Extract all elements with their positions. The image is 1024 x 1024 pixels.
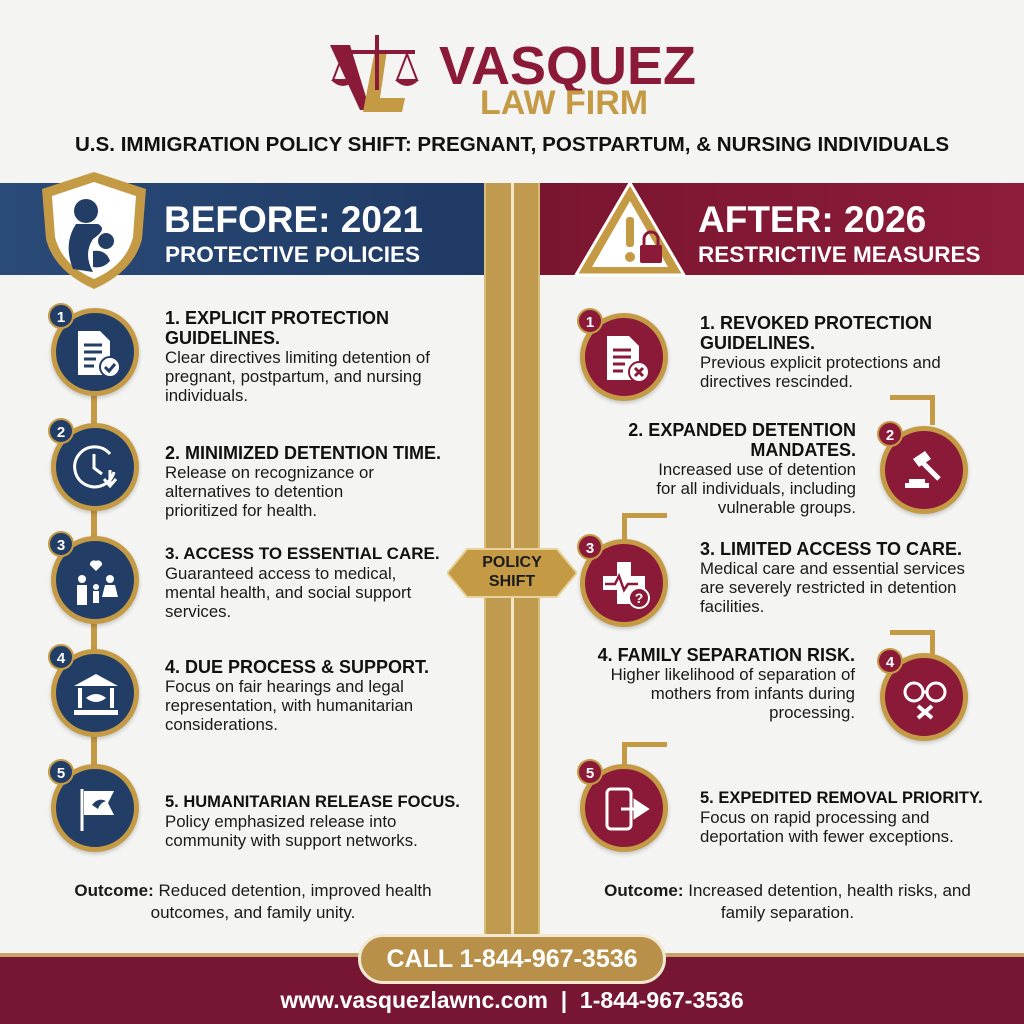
brand name: VASQUEZ [439, 36, 696, 96]
item R1 [577, 308, 941, 405]
header: before: PROTECTIVE POLICIES [165, 242, 420, 267]
call button: CALL 1-844-967-3536 [386, 945, 638, 973]
item R3: 3. LIMITED ACCESS TO CARE. [700, 539, 962, 559]
item L4: Focus on fair hearings and legal representation, with humanitarian considerations. [165, 677, 413, 734]
item R4: 4. FAMILY SEPARATION RISK. [598, 645, 855, 665]
item L1: Clear directives limiting detention of pregnant, postpartum, and nursing individuals. [165, 348, 430, 405]
item R4: Higher likelihood of separation of mothers from infants during processing. [611, 665, 855, 722]
item L4 [48, 644, 429, 741]
item L3: Guaranteed access to medical, mental health, and social support services. [165, 564, 411, 621]
item L4: 4. DUE PROCESS & SUPPORT. [165, 657, 429, 677]
center pillar [484, 183, 540, 958]
item R1: Previous explicit protections and directives rescinded. [700, 353, 941, 391]
item L1: 1 [57, 309, 65, 326]
item R3 [577, 534, 965, 631]
icon: scales [330, 35, 419, 112]
logo [330, 35, 696, 122]
item L4: 4 [57, 650, 65, 667]
header: before: BEFORE: 2021 [164, 199, 423, 240]
item R5 [577, 759, 983, 856]
header: before [0, 183, 484, 275]
right connector arrows [890, 395, 935, 425]
item R1: 1 [586, 314, 594, 331]
item L3: 3. ACCESS TO ESSENTIAL CARE. [165, 544, 440, 563]
item L3 [48, 531, 440, 628]
outcome right: Outcome: Increased detention, health risks, and family separation. [604, 881, 971, 922]
policy shift badge [447, 548, 577, 598]
policy shift badge: POLICY [482, 554, 542, 571]
item R2 [628, 420, 970, 518]
icon: warning lock [574, 182, 686, 276]
item L5: Policy emphasized release into community with support networks. [165, 812, 418, 850]
item L5: 5. HUMANITARIAN RELEASE FOCUS. [165, 793, 460, 811]
header: after [540, 183, 1024, 275]
item L5: 5 [57, 765, 65, 782]
item R3: Medical care and essential services are severely restricted in detention facilities. [700, 559, 965, 616]
outcome left: Outcome: Reduced detention, improved health outcomes, and family unity. [74, 881, 432, 922]
item R2: Increased use of detention for all individuals, including vulnerable groups. [656, 460, 856, 517]
item R2: 2 [886, 427, 894, 444]
item R5: 5. EXPEDITED REMOVAL PRIORITY. [700, 789, 983, 807]
item R4 [598, 645, 970, 745]
header: after: RESTRICTIVE MEASURES [698, 242, 981, 267]
item R1: 1. REVOKED PROTECTION GUIDELINES. [700, 313, 932, 353]
website: www.vasquezlawnc.com | 1-844-967-3536 [280, 987, 744, 1013]
item L2: 2. MINIMIZED DETENTION TIME. [165, 443, 441, 463]
item L2 [48, 418, 441, 520]
policy shift badge: SHIFT [489, 573, 535, 590]
item R3: ? [635, 590, 643, 606]
item L3: 3 [57, 537, 65, 554]
item R3: 3 [586, 540, 594, 557]
logo: LAW FIRM [480, 84, 648, 122]
footer [0, 953, 1024, 1024]
left arrows [91, 395, 97, 815]
item L1 [48, 303, 430, 405]
item L5 [48, 759, 460, 856]
call button [358, 934, 666, 984]
item R4: 4 [886, 654, 894, 671]
item R5: Focus on rapid processing and deportation with fewer exceptions. [700, 808, 954, 846]
header: after: AFTER: 2026 [698, 199, 926, 240]
icon: shield mother [42, 172, 146, 289]
item L2: Release on recognizance or alternatives to detention prioritized for health. [165, 463, 374, 520]
item R5: 5 [586, 765, 594, 782]
item R2: 2. EXPANDED DETENTION MANDATES. [628, 420, 856, 460]
item L1: 1. EXPLICIT PROTECTION GUIDELINES. [165, 308, 389, 348]
item L2: 2 [57, 424, 65, 441]
subtitle: U.S. IMMIGRATION POLICY SHIFT: PREGNANT, POSTPARTUM, & NURSING INDIVIDUALS [75, 133, 949, 156]
